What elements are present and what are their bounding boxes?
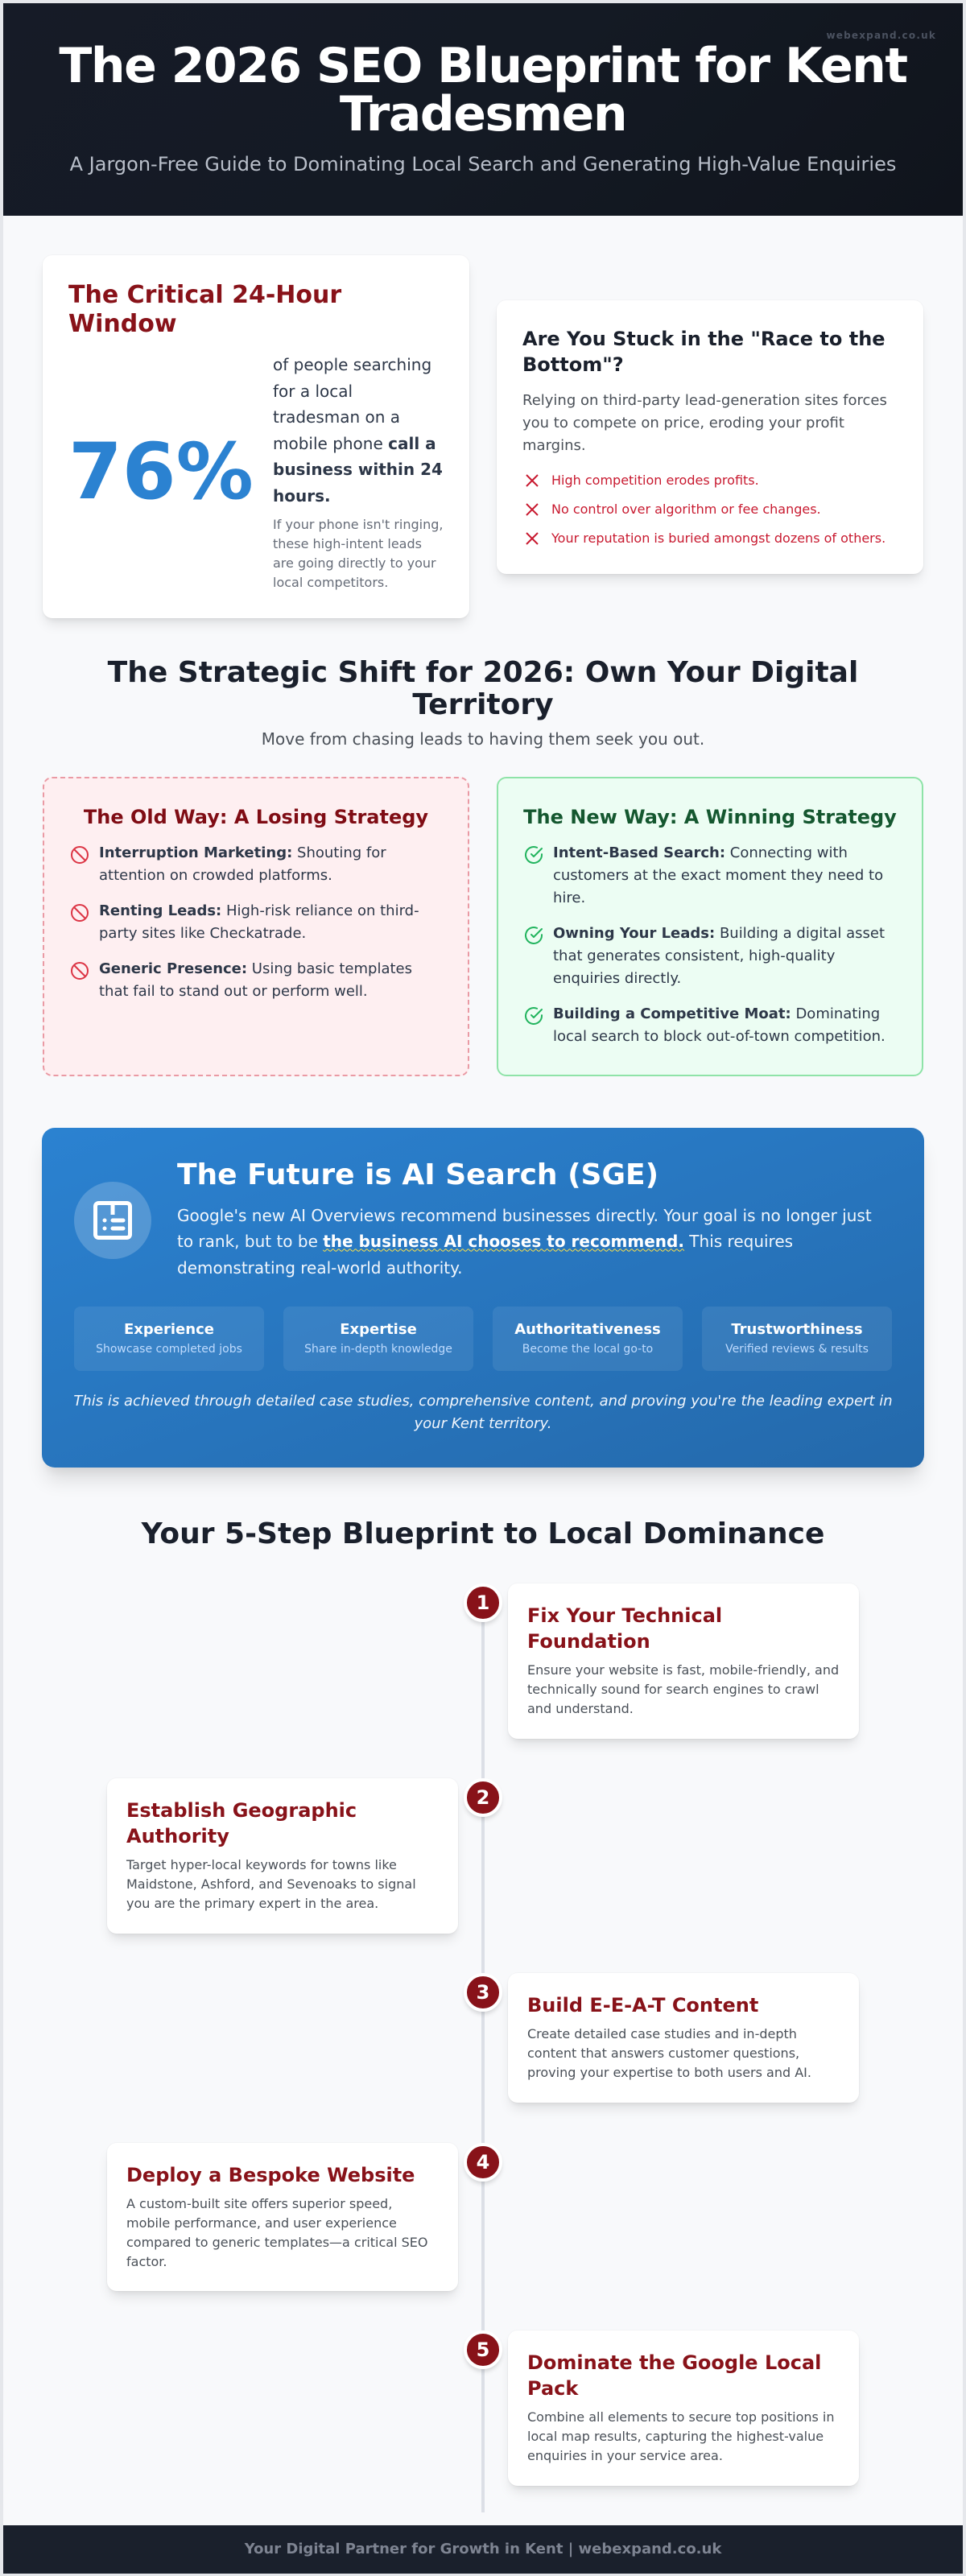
- step 5 text: Combine all elements to secure top positions in local map results, capturing the highest-value enquiries in your service area.: [527, 2409, 835, 2463]
- item: interruption marketing: Interruption Marketing: Shouting for attention on crowded platforms.: [99, 844, 386, 884]
- step 4 title: Deploy a Bespoke Website: [126, 2164, 415, 2186]
- step 1 title: Fix Your Technical Foundation: [527, 1604, 722, 1653]
- pillar: authoritativeness: Become the local go-to: [522, 1343, 653, 1356]
- pillar: trustworthiness: Verified reviews & results: [725, 1343, 869, 1356]
- step 2 title: Establish Geographic Authority: [126, 1799, 357, 1847]
- step 1 card: [508, 1583, 859, 1739]
- pillar: experience: Experience: [124, 1321, 214, 1338]
- pillar: trustworthiness: Trustworthiness: [731, 1321, 863, 1338]
- step 4 text: A custom-built site offers superior speed, mobile performance, and user experience compared to generic templates—a critical SEO factor.: [126, 2196, 427, 2269]
- step 5 number: [464, 2330, 502, 2369]
- step 3 card: [508, 1973, 859, 2103]
- pillar: experience: Showcase completed jobs: [96, 1343, 242, 1356]
- heading: The Future is AI Search (SGE): [177, 1158, 658, 1191]
- step 2 number: [464, 1778, 502, 1817]
- step 5 title: Dominate the Google Local Pack: [527, 2351, 821, 2400]
- step 5 number: 5: [477, 2339, 489, 2361]
- step 3 text: Create detailed case studies and in-depth content that answers customer questions, proving your expertise to both users and AI.: [527, 2026, 811, 2080]
- pillar: authoritativeness: [493, 1307, 683, 1371]
- heading: Are You Stuck in the "Race to the Bottom"?: [522, 328, 886, 376]
- step 2 card: [107, 1778, 458, 1934]
- panel: old way: [43, 777, 469, 1076]
- item: intent-based search: Intent-Based Search: Connecting with customers at the exact moment they need to hire.: [553, 844, 883, 906]
- risk item 3: Your reputation is buried amongst dozens of others.: [551, 530, 886, 546]
- pillar: expertise: Expertise: [340, 1321, 417, 1338]
- risk item 2: No control over algorithm or fee changes.: [551, 502, 821, 517]
- section heading: 5-step blueprint: Your 5-Step Blueprint to Local Dominance: [142, 1517, 824, 1550]
- item: owning your leads: Owning Your Leads: Building a digital asset that generates consistent, high-quality enquiries directly.: [553, 925, 885, 987]
- heading: The New Way: A Winning Strategy: [523, 806, 897, 828]
- step 4 number: [464, 2143, 502, 2182]
- pillar: expertise: [283, 1307, 473, 1371]
- item: generic presence: Generic Presence: Using basic templates that fail to stand out or perform well.: [99, 960, 412, 1000]
- big stat: 76%: [68, 427, 254, 517]
- title: The 2026 SEO Blueprint for Kent Tradesmen: [59, 38, 907, 142]
- step 2 number: 2: [477, 1786, 489, 1809]
- stat description: of people searching for a local tradesman on a mobile phone call a business within 24 hours.: [273, 355, 443, 506]
- subtitle: A Jargon-Free Guide to Dominating Local Search and Generating High-Value Enquiries: [70, 153, 896, 175]
- closing note: This is achieved through detailed case studies, comprehensive content, and proving you're the leading expert in your Kent territory.: [73, 1393, 893, 1432]
- panel: critical 24-hour window: [43, 255, 469, 618]
- risk item 1: High competition erodes profits.: [551, 473, 759, 488]
- step 3 number: 3: [477, 1981, 489, 2004]
- pillar: authoritativeness: Authoritativeness: [514, 1321, 661, 1338]
- item: renting leads: Renting Leads: High-risk reliance on third-party sites like Checkatrade.: [99, 902, 419, 942]
- footer: [3, 2525, 963, 2574]
- heading: The Critical 24-Hour Window: [68, 281, 341, 338]
- step 4 number: 4: [477, 2151, 489, 2174]
- paragraph: Google's new AI Overviews recommend businesses directly. Your goal is no longer just to rank, but to be the business AI chooses to recommend. This requires demonstrating real-world authority.: [177, 1206, 872, 1278]
- step 1 number: [464, 1583, 502, 1622]
- pillar: trustworthiness: [702, 1307, 892, 1371]
- step 1 text: Ensure your website is fast, mobile-friendly, and technically sound for search engines to crawl and understand.: [527, 1662, 839, 1716]
- step 5 card: [508, 2330, 859, 2486]
- panel: AI search: [42, 1128, 924, 1468]
- section heading: strategic shift: The Strategic Shift for 2026: Own Your Digital Territory: [108, 656, 858, 721]
- panel: race to the bottom: [497, 300, 923, 574]
- step 4 card: [107, 2143, 458, 2291]
- step 2 text: Target hyper-local keywords for towns like Maidstone, Ashford, and Sevenoaks to signal you are the primary expert in the area.: [126, 1857, 416, 1911]
- pillar: expertise: Share in-depth knowledge: [304, 1343, 452, 1356]
- icon: AI overview: [74, 1182, 151, 1259]
- step 1 number: 1: [477, 1591, 489, 1614]
- pillar: experience: [74, 1307, 264, 1371]
- footer: Your Digital Partner for Growth in Kent | webexpand.co.uk: [245, 2541, 721, 2557]
- step 3 title: Build E-E-A-T Content: [527, 1994, 758, 2017]
- header banner: [3, 3, 963, 216]
- stat note: If your phone isn't ringing, these high-intent leads are going directly to your local competitors.: [273, 517, 443, 590]
- heading: The Old Way: A Losing Strategy: [84, 806, 428, 828]
- paragraph: Relying on third-party lead-generation sites forces you to compete on price, eroding your profit margins.: [522, 392, 887, 454]
- section subheading: Move from chasing leads to having them seek you out.: [262, 729, 704, 749]
- watermark: webexpand.co.uk: [826, 30, 936, 41]
- timeline line: [481, 1586, 485, 2512]
- panel: new way: [497, 777, 923, 1076]
- item: competitive moat: Building a Competitive Moat: Dominating local search to block out-of-town competition.: [553, 1005, 886, 1045]
- step 3 number: [464, 1973, 502, 2012]
